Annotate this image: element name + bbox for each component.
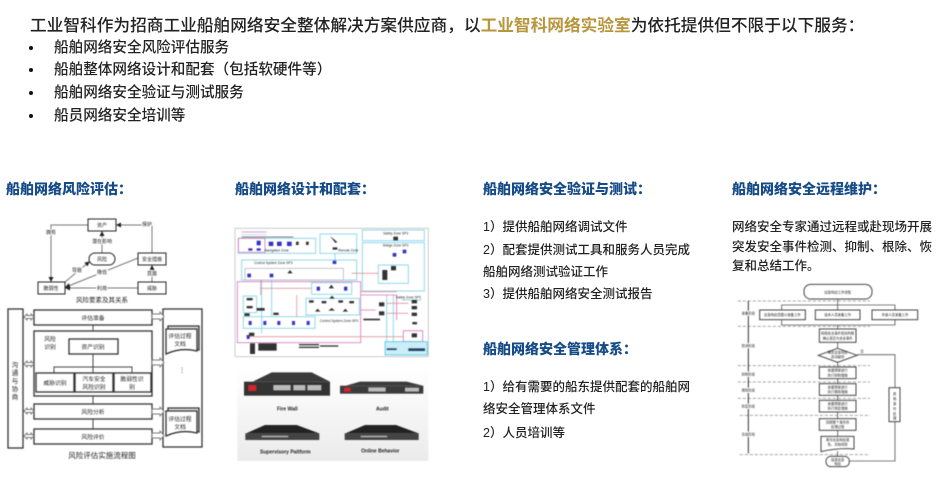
item 1: 1）给有需要的船东提供配套的船舶网 [483,380,690,394]
diagram: risk assessment flow: 风险识别 [82,383,106,391]
diagram: emergency response flowchart: 启动级别 [831,354,845,359]
diagram: risk assessment flow: 评估过程 [168,415,192,423]
diagram: risk elements relations: 利用 [97,285,107,292]
diagram: risk assessment flow: 资产识别 [81,343,105,351]
remote maintenance description: 复和总结工作。 [732,259,820,273]
heading: verification: 船舶网络安全验证与测试： [483,181,651,197]
diagram: risk assessment flow: 评估准备 [81,314,105,322]
diagram: risk elements relations: 资产 [97,222,107,229]
diagram: emergency response flowchart: 技术人员准备工作 [824,312,852,317]
diagram: emergency response flowchart [737,283,919,468]
diagram: risk assessment flow: 汽车安全 [82,375,106,383]
heading: risk assessment: 船舶网络风险评估： [6,181,132,197]
diagram: risk elements relations: 脆弱性 [43,285,59,292]
diagram: emergency response flowchart: 响应 [834,461,842,466]
diagram: risk assessment flow: 风险 [44,335,56,343]
diagram: risk elements relations: 拥有 [46,229,56,236]
verification service list [483,220,690,301]
diagram: risk assessment flow: 商 [12,392,19,401]
diagram: risk elements relations: 导致 [72,267,82,274]
diagram: ship network topology: Control System Zone SP3 [254,261,293,265]
diagram: risk elements relations [36,218,168,304]
diagram: risk assessment flow: 与 [12,377,18,385]
diagram: risk assessment flow: 文档 [174,423,186,431]
remote maintenance description: 突发安全事件检测、抑制、根除、恢 [732,240,932,254]
diagram: emergency response flowchart: 依据预案进行 [828,401,848,406]
diagram: risk elements relations: 保护 [142,221,152,228]
diagram: ship network topology [234,228,430,358]
service bullet list [29,39,331,124]
diagram: risk elements relations: 风险 [97,256,107,263]
diagram: emergency response flowchart: 告、总结经验 [828,441,848,446]
diagram: risk assessment flow: 脆弱性识 [120,375,144,383]
diagram: emergency response flowchart: 依据预案进行 [828,368,848,373]
item 3: 3）提供船舶网络安全测试报告 [483,287,652,301]
diagram: emergency response flowchart: 执行恢复措施 [828,406,848,411]
diagram: risk assessment flow: 风险分析 [81,408,105,416]
diagram: emergency response flowchart: 准备阶段 [742,311,756,316]
diagram: emergency response flowchart: 其 [893,392,897,396]
diagram: emergency response flowchart: 恢复阶段 [742,404,756,409]
device product photos [238,372,428,461]
diagram: emergency response flowchart: 根除阶段 [742,388,756,393]
diagram: emergency response flowchart: 检测阶段 [742,343,756,348]
diagram: ship network topology: Safety Zone SP3 [396,295,421,299]
item 2: 2）配套提供测试工具和服务人员完成 [483,243,690,257]
diagram: emergency response flowchart: 执行根除措施 [828,389,848,394]
diagram: emergency response flowchart: 依据预案进行 [828,384,848,389]
diagram: risk elements relations: 威胁 [147,285,157,292]
remote maintenance description: 网络安全专家通过远程或赴现场开展 [732,220,932,234]
diagram: emergency response flowchart: 外部人员准备工作 [882,312,909,317]
diagram: risk assessment flow: 风险评价 [81,433,105,441]
diagram: risk assessment flow: 识别 [44,343,56,351]
diagram: emergency response flowchart: 否 [860,350,864,354]
diagram: ship network topology: Remote Zone [338,249,359,253]
diagram: emergency response flowchart: 结束应急 [831,457,845,462]
diagram: risk elements relations: 安全措施 [142,256,162,263]
device: supervisory platform [245,425,319,456]
diagram: emergency response flowchart: 总结阶段 [742,431,756,436]
diagram: risk assessment flow: 协 [12,384,19,393]
heading: design: 船舶网络设计和配套： [235,181,375,197]
diagram: risk elements relations: 降低 [97,269,107,276]
diagram: risk assessment flow: 别 [129,383,135,391]
item 1: 1）提供船舶网络调试文件 [483,220,627,234]
device: audit: Audit [376,406,389,412]
diagram: ship network topology: Navigation Zone [265,249,289,253]
heading: management system: 船舶网络安全管理体系： [483,341,637,357]
diagram: emergency response flowchart: 应急响应范围小准备工作 [764,312,801,317]
diagram: emergency response flowchart: 事 [893,401,897,406]
diagram: emergency response flowchart: 回顾整个事件的 [826,419,850,424]
diagram: risk assessment flow [6,308,204,460]
diagram: emergency response flowchart: 处 [893,411,897,416]
diagram: emergency response flowchart: 理 [893,416,897,421]
diagram: emergency response flowchart: 确认是否为安全事件 [823,335,853,340]
diagram: risk assessment flow: 文档 [174,340,186,348]
bullet 3: 船舶网络安全验证与测试服务 [54,85,244,101]
diagram: risk assessment flow: 评估过程 [168,332,192,340]
diagram: emergency response flowchart: 执行抑制措施 [828,372,848,377]
diagram: risk assessment flow: 通 [12,368,19,377]
diagram: ship network topology: Safety Zone SP3 [383,231,408,235]
bullet 4: 船员网络安全培训等 [54,108,185,124]
heading: remote maintenance: 船舶网络安全远程维护： [732,181,886,197]
diagram: ship network topology: Bridge Zone SP3 [383,243,408,247]
diagram: risk assessment flow: ⋮ [179,368,185,374]
device: supervisory platform: Supervisory Paltform [260,450,311,456]
diagram: risk elements relations: 风险要素及其关系 [76,295,128,304]
diagram: emergency response flowchart: 撰写应急响应报 [826,437,850,442]
diagram: risk assessment flow: 威胁识别 [43,379,67,387]
diagram: emergency response flowchart: 网络攻击事件检测判断 [821,331,855,336]
device: audit [340,382,423,412]
diagram: risk elements relations: 直面 [147,270,157,277]
diagram: emergency response flowchart: 抑制阶段 [742,371,756,376]
item 1 continued: 络安全管理体系文件 [483,402,596,416]
bullet 1: 船舶网络安全风险评估服务 [54,40,229,56]
item 2: 2）人员培训等 [483,426,565,440]
diagram: emergency response flowchart: 处理过程 [831,424,845,429]
remote maintenance description [732,220,932,273]
diagram: risk assessment flow: 沟 [12,360,18,369]
device: fire wall: Fire Wall [277,406,298,412]
device: online behavior [345,425,419,455]
intro sentence: 工业智科作为招商工业船舶网络安全整体解决方案供应商，以工业智科网络实验室为依托提供但不限于以下服务： [30,16,864,35]
diagram: ship network topology: Control System Zone SP3 [320,319,358,323]
diagram: emergency response flowchart: 件 [893,406,897,411]
management service list [483,380,690,440]
device: fire wall [244,372,330,412]
diagram: emergency response flowchart: 他 [893,396,897,401]
device: online behavior: Online Behavior [361,449,400,455]
diagram: risk assessment flow: 风险评估实施流程图 [68,450,136,460]
diagram: emergency response flowchart: 应急响应工作流程 [824,289,852,294]
diagram: risk elements relations: 潜在影响 [92,238,112,245]
diagram: emergency response flowchart: 确定应急响应 [828,350,848,355]
item 2 continued: 船舶网络测试验证工作 [483,265,608,279]
bullet 2: 船舶整体网络设计和配套（包括软硬件等） [54,62,331,78]
